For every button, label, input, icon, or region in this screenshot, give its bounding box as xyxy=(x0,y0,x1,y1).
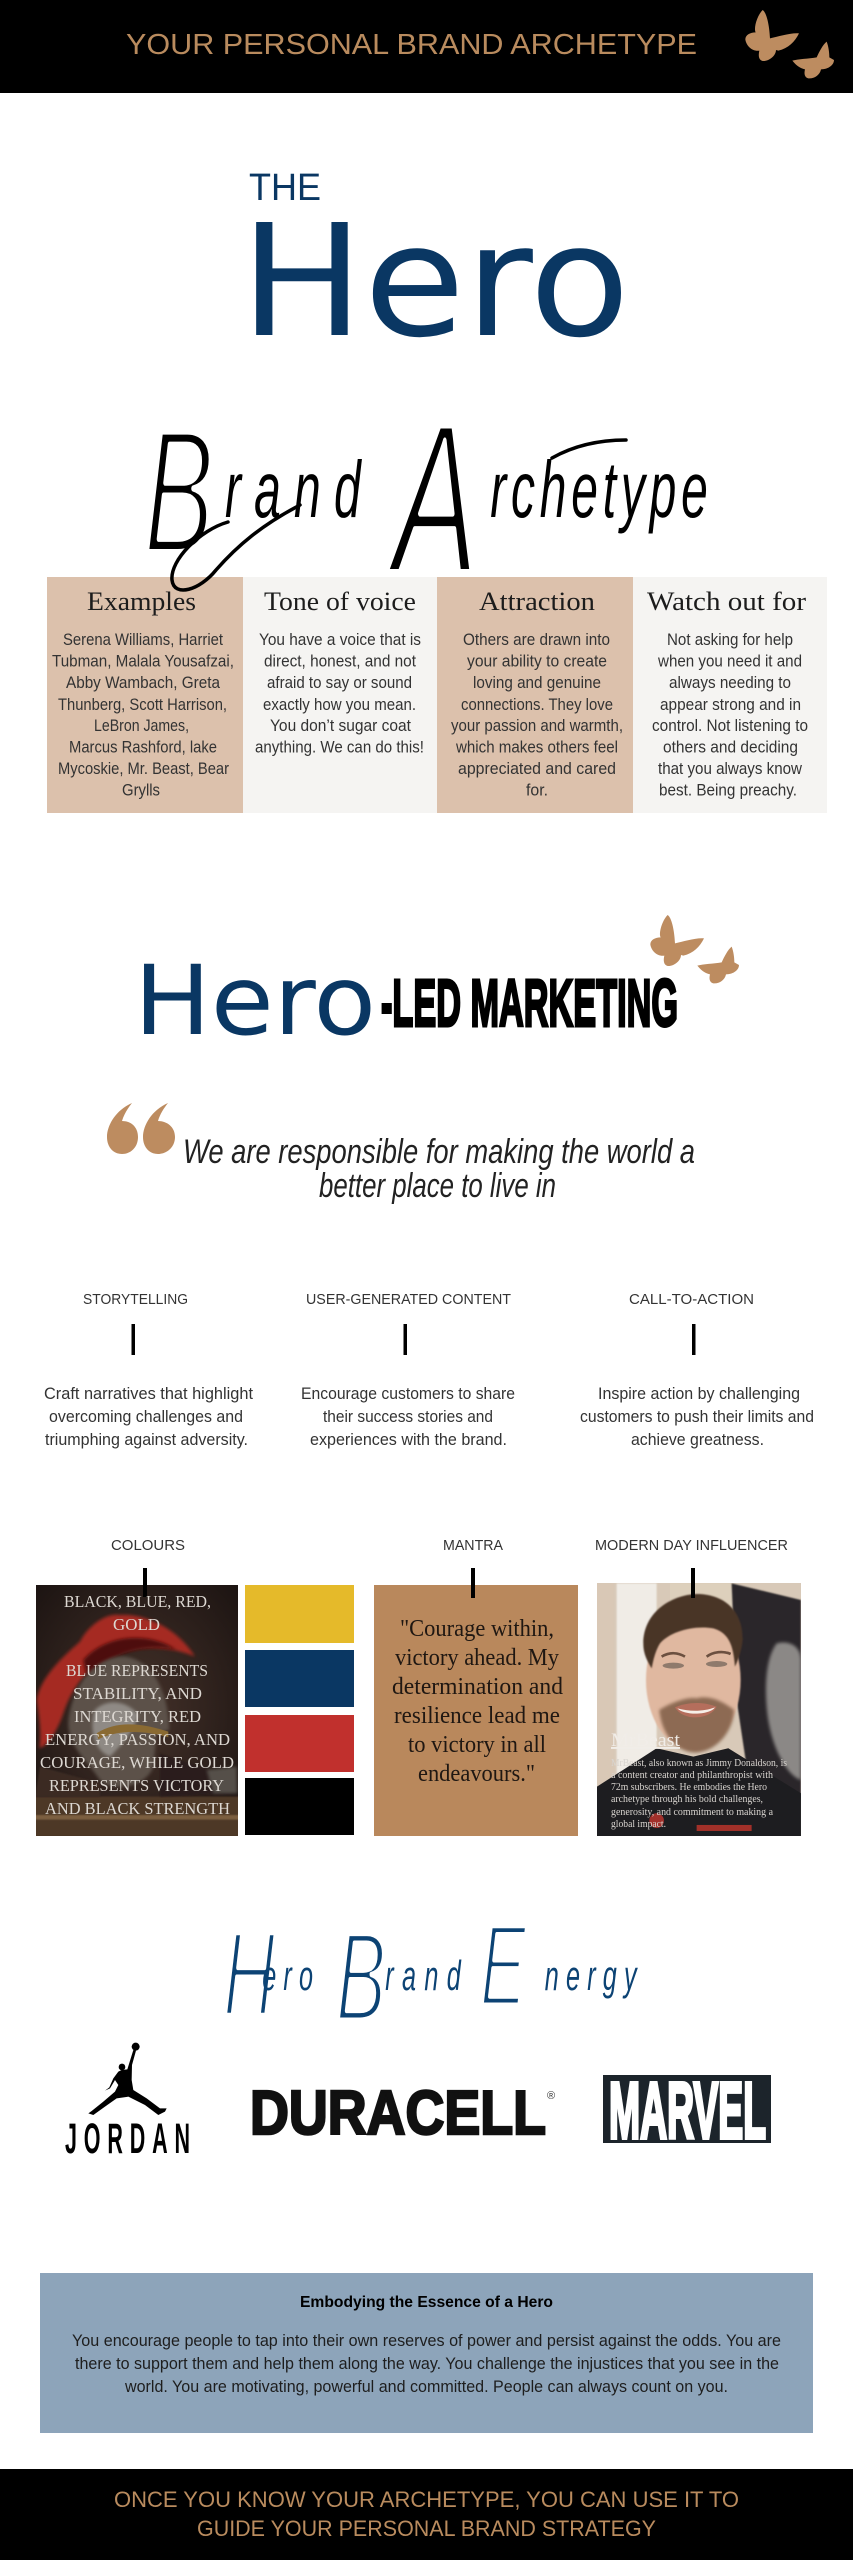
column: watch out for: best. Being preachy. xyxy=(659,782,797,800)
hero word: Hero xyxy=(134,945,376,1057)
column: examples: Grylls xyxy=(122,782,160,800)
image caption: INTEGRITY, RED xyxy=(74,1707,201,1726)
heading: Hero Brand Energy: H xyxy=(223,1906,276,2040)
colour swatches xyxy=(245,1585,354,1835)
image caption xyxy=(40,1592,234,1818)
image caption: COURAGE, WHILE GOLD xyxy=(40,1753,234,1772)
column: watch out for: others and deciding xyxy=(663,738,798,756)
column: tone of voice: Tone of voice xyxy=(264,587,416,616)
label: MODERN DAY INFLUENCER xyxy=(595,1538,788,1554)
column: watch out for: Not asking for help xyxy=(667,631,793,649)
icon: quotation mark xyxy=(107,1103,175,1154)
column: user-generated content: Encourage customers to share xyxy=(301,1385,515,1403)
column: watch out for: always needing to xyxy=(669,674,791,692)
column: watch out for: control. Not listening to xyxy=(652,717,808,735)
mantra text: to victory in all xyxy=(408,1732,546,1758)
column: attraction: which makes others feel xyxy=(455,738,618,756)
top banner xyxy=(0,0,853,93)
panel: archetype table xyxy=(47,577,827,813)
panel: colours xyxy=(33,1538,354,1837)
panel: modern day influencer xyxy=(595,1538,801,1837)
heading: Brand Archetype: rand xyxy=(225,444,400,534)
column: examples: Thunberg, Scott Harrison, xyxy=(58,696,227,714)
image caption: GOLD xyxy=(113,1615,160,1634)
column: attraction xyxy=(437,577,633,813)
quote text xyxy=(183,1133,695,1205)
image caption: BLACK, BLUE, RED, xyxy=(64,1592,211,1611)
panel text xyxy=(72,2332,781,2396)
column: examples xyxy=(47,577,243,813)
heading: Hero Brand Energy: ero xyxy=(262,1954,334,2000)
heading: Brand Archetype: A xyxy=(386,380,478,618)
heading: Hero-led marketing xyxy=(134,945,678,1057)
column: storytelling: Craft narratives that highlight xyxy=(44,1385,253,1403)
logo: Duracell: ® xyxy=(547,2090,555,2102)
influencer caption: global impact. xyxy=(611,1819,666,1830)
influencer caption: a content creator and philanthropist with xyxy=(611,1770,773,1781)
heading: Hero Brand Energy: nergy xyxy=(545,1954,644,2000)
column: watch out for: appear strong and in xyxy=(660,696,801,714)
column: tone of voice: afraid to say or sound xyxy=(267,674,412,692)
banner text xyxy=(114,2487,739,2541)
tick xyxy=(471,1568,475,1598)
icon: butterflies xyxy=(745,10,834,78)
panel text: there to support them and help them along the way. You challenge the injustices that you see in the xyxy=(75,2355,779,2373)
column: examples: Mycoskie, Mr. Beast, Bear xyxy=(58,760,229,778)
column: watch out for: when you need it and xyxy=(657,652,802,670)
logo: Jordan xyxy=(65,2043,190,2163)
column: attraction: for. xyxy=(526,782,548,800)
mantra text: "Courage within, xyxy=(400,1616,554,1642)
influencer caption: MrBeast, also known as Jimmy Donaldson, is xyxy=(611,1758,787,1769)
column: examples: Serena Williams, Harriet xyxy=(63,631,223,649)
mantra text: victory ahead. My xyxy=(395,1645,559,1671)
column: user-generated content xyxy=(301,1292,515,1449)
column: examples: LeBron James, xyxy=(94,717,189,735)
column: user-generated content: experiences with the brand. xyxy=(310,1431,507,1449)
influencer caption: archetype through his bold challenges, xyxy=(611,1794,763,1805)
column: watch out for xyxy=(633,577,827,813)
column: attraction: Others are drawn into xyxy=(463,631,610,649)
tick xyxy=(143,1568,147,1597)
column: watch out for: that you always know xyxy=(658,760,802,778)
panel text: You encourage people to tap into their own reserves of power and persist against the odds. You are xyxy=(72,2332,781,2350)
column: call-to-action xyxy=(580,1292,814,1449)
column: tone of voice: You don’t sugar coat xyxy=(270,717,411,735)
panel: mantra xyxy=(374,1538,578,1836)
column: tone of voice: exactly how you mean. xyxy=(263,696,416,714)
mantra box xyxy=(374,1585,578,1836)
mantra text: determination and xyxy=(392,1674,563,1700)
heading: Hero Brand Energy xyxy=(223,1902,644,2047)
influencer caption: MrBeast xyxy=(611,1730,681,1751)
heading: Hero Brand Energy: rand xyxy=(385,1954,485,2000)
influencer caption xyxy=(611,1730,787,1830)
icon: butterflies xyxy=(650,915,739,983)
column: user-generated content: their success stories and xyxy=(323,1408,493,1426)
column: watch out for: Watch out for xyxy=(647,587,806,616)
image: helmet xyxy=(33,1585,240,1837)
image caption: BLUE REPRESENTS xyxy=(66,1661,208,1680)
column: user-generated content: USER-GENERATED CONTENT xyxy=(306,1292,511,1308)
heading: Hero Brand Energy: B xyxy=(336,1907,386,2047)
column: attraction: connections. They love xyxy=(461,696,613,714)
panel: essence of a hero xyxy=(40,2273,813,2433)
mantra text: resilience lead me xyxy=(394,1703,560,1729)
tick xyxy=(691,1568,695,1598)
influencer caption: 72m subscribers. He embodies the Hero xyxy=(611,1782,767,1793)
icon: jumpman xyxy=(88,2043,167,2115)
hero wordmark: Hero xyxy=(240,191,630,372)
image: portrait xyxy=(597,1583,801,1837)
heading: Brand Archetype: rchetype xyxy=(490,444,713,534)
column: attraction: your passion and warmth, xyxy=(451,717,623,735)
banner text: GUIDE YOUR PERSONAL BRAND STRATEGY xyxy=(197,2516,656,2541)
image caption: REPRESENTS VICTORY xyxy=(49,1776,224,1795)
heading: Hero Brand Energy: E xyxy=(480,1902,527,2030)
quote text: better place to live in xyxy=(319,1167,556,1205)
title: The Hero xyxy=(240,167,630,372)
column: attraction: appreciated and cared xyxy=(458,760,616,778)
bottom banner xyxy=(0,2469,853,2560)
logo: Duracell: DURACELL xyxy=(250,2079,546,2148)
column: examples: Abby Wambach, Greta xyxy=(66,674,221,692)
image caption: STABILITY, AND xyxy=(73,1684,202,1703)
column: storytelling xyxy=(44,1292,253,1449)
column: call-to-action: CALL-TO-ACTION xyxy=(629,1292,754,1308)
column: storytelling: triumphing against adversity. xyxy=(45,1431,248,1449)
image caption: AND BLACK STRENGTH xyxy=(45,1799,230,1818)
heading: Brand Archetype xyxy=(144,380,713,618)
banner title: YOUR PERSONAL BRAND ARCHETYPE xyxy=(126,29,697,61)
column: examples: Tubman, Malala Yousafzai, xyxy=(52,652,234,670)
column: call-to-action: Inspire action by challenging xyxy=(598,1385,800,1403)
logo: Marvel xyxy=(603,2066,771,2155)
mantra text xyxy=(392,1616,563,1787)
heading: Brand Archetype: B xyxy=(144,393,214,590)
label: MANTRA xyxy=(443,1538,503,1554)
column: attraction: loving and genuine xyxy=(473,674,601,692)
column: storytelling: STORYTELLING xyxy=(83,1292,188,1308)
panel title: Embodying the Essence of a Hero xyxy=(300,2294,553,2311)
column: tone of voice xyxy=(243,577,437,813)
wordmark: JORDAN xyxy=(65,2115,190,2163)
column: call-to-action: achieve greatness. xyxy=(631,1431,764,1449)
column: tone of voice: You have a voice that is xyxy=(259,631,421,649)
column: attraction: Attraction xyxy=(479,587,595,616)
column: attraction: your ability to create xyxy=(467,652,607,670)
label: COLOURS xyxy=(111,1538,185,1554)
column: call-to-action: customers to push their limits and xyxy=(580,1408,814,1426)
panel text: world. You are motivating, powerful and committed. People can always count on you. xyxy=(124,2378,728,2396)
column: tone of voice: direct, honest, and not xyxy=(264,652,416,670)
column: examples: Marcus Rashford, lake xyxy=(69,738,217,756)
mantra text: endeavours." xyxy=(418,1761,535,1787)
influencer caption: generosity, and commitment to making a xyxy=(611,1807,774,1818)
banner text: ONCE YOU KNOW YOUR ARCHETYPE, YOU CAN USE IT TO xyxy=(114,2487,739,2512)
column: storytelling: overcoming challenges and xyxy=(49,1408,243,1426)
image caption: ENERGY, PASSION, AND xyxy=(45,1730,230,1749)
the: THE xyxy=(249,167,321,209)
column: examples: Examples xyxy=(87,587,196,616)
quote text: We are responsible for making the world a xyxy=(183,1133,695,1171)
column: tone of voice: anything. We can do this! xyxy=(255,738,424,756)
